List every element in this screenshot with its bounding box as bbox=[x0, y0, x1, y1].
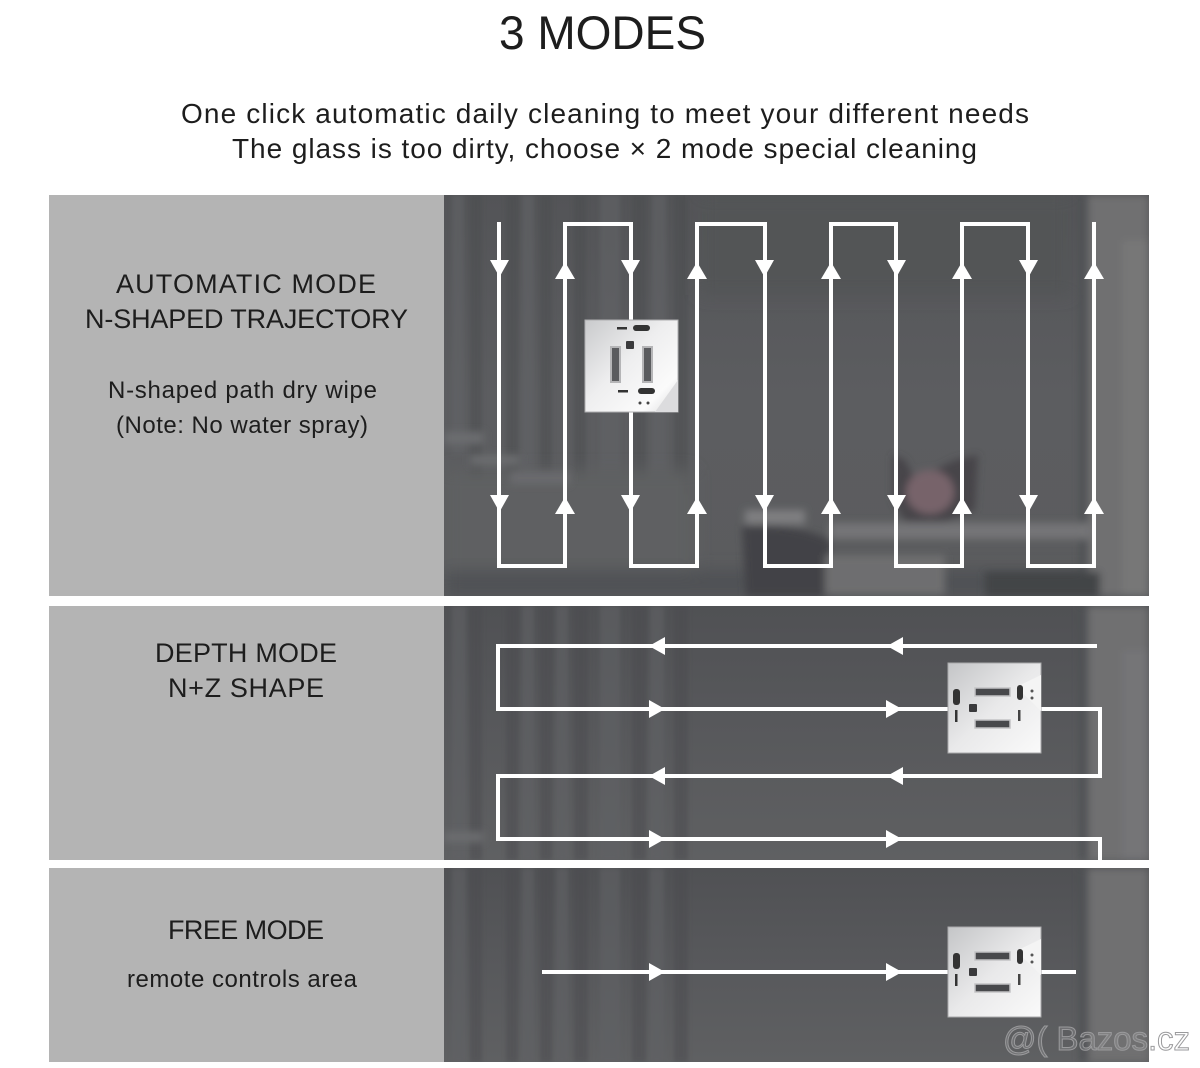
icon: window cleaning robot bbox=[948, 927, 1041, 1017]
label panel: depth mode text: N+Z SHAPE bbox=[168, 673, 324, 703]
icon: window cleaning robot bbox=[585, 320, 678, 412]
arrowheads bbox=[649, 963, 902, 981]
title: 3 MODES bbox=[499, 6, 706, 59]
subtitle: One click automatic daily cleaning to meet your different needs bbox=[181, 98, 1029, 129]
label panel: free mode text: FREE MODE bbox=[168, 915, 324, 945]
arrowheads bbox=[490, 260, 1104, 514]
panel: depth mode bbox=[49, 606, 1149, 860]
label panel: automatic mode text: N-SHAPED TRAJECTORY bbox=[85, 304, 408, 334]
photo background: blurred room bbox=[444, 195, 1149, 596]
photo background: blurred room bbox=[444, 606, 1149, 860]
label panel: free mode text: remote controls area bbox=[127, 966, 358, 993]
path: free mode line bbox=[542, 963, 1076, 981]
label panel: automatic mode text bbox=[49, 195, 444, 596]
path: N-shaped trajectory bbox=[490, 222, 1104, 566]
panel: automatic mode bbox=[49, 195, 1149, 596]
subtitle bbox=[181, 98, 1029, 164]
path: N+Z trajectory bbox=[498, 637, 1100, 860]
photo background: blurred room bbox=[444, 868, 1149, 1062]
label panel: free mode text bbox=[49, 868, 444, 1062]
label panel: depth mode text bbox=[49, 606, 444, 860]
panel: free mode bbox=[49, 868, 1149, 1062]
label panel: automatic mode text: (Note: No water spray) bbox=[116, 412, 368, 439]
watermark: @( Bazos.cz bbox=[1003, 1020, 1190, 1057]
label panel: automatic mode text: N-shaped path dry wipe bbox=[108, 377, 377, 404]
subtitle: The glass is too dirty, choose × 2 mode special cleaning bbox=[232, 133, 977, 164]
arrowheads bbox=[649, 637, 903, 848]
label panel: depth mode text: DEPTH MODE bbox=[155, 638, 337, 668]
icon: window cleaning robot bbox=[948, 663, 1041, 753]
label panel: automatic mode text: AUTOMATIC MODE bbox=[116, 269, 376, 299]
